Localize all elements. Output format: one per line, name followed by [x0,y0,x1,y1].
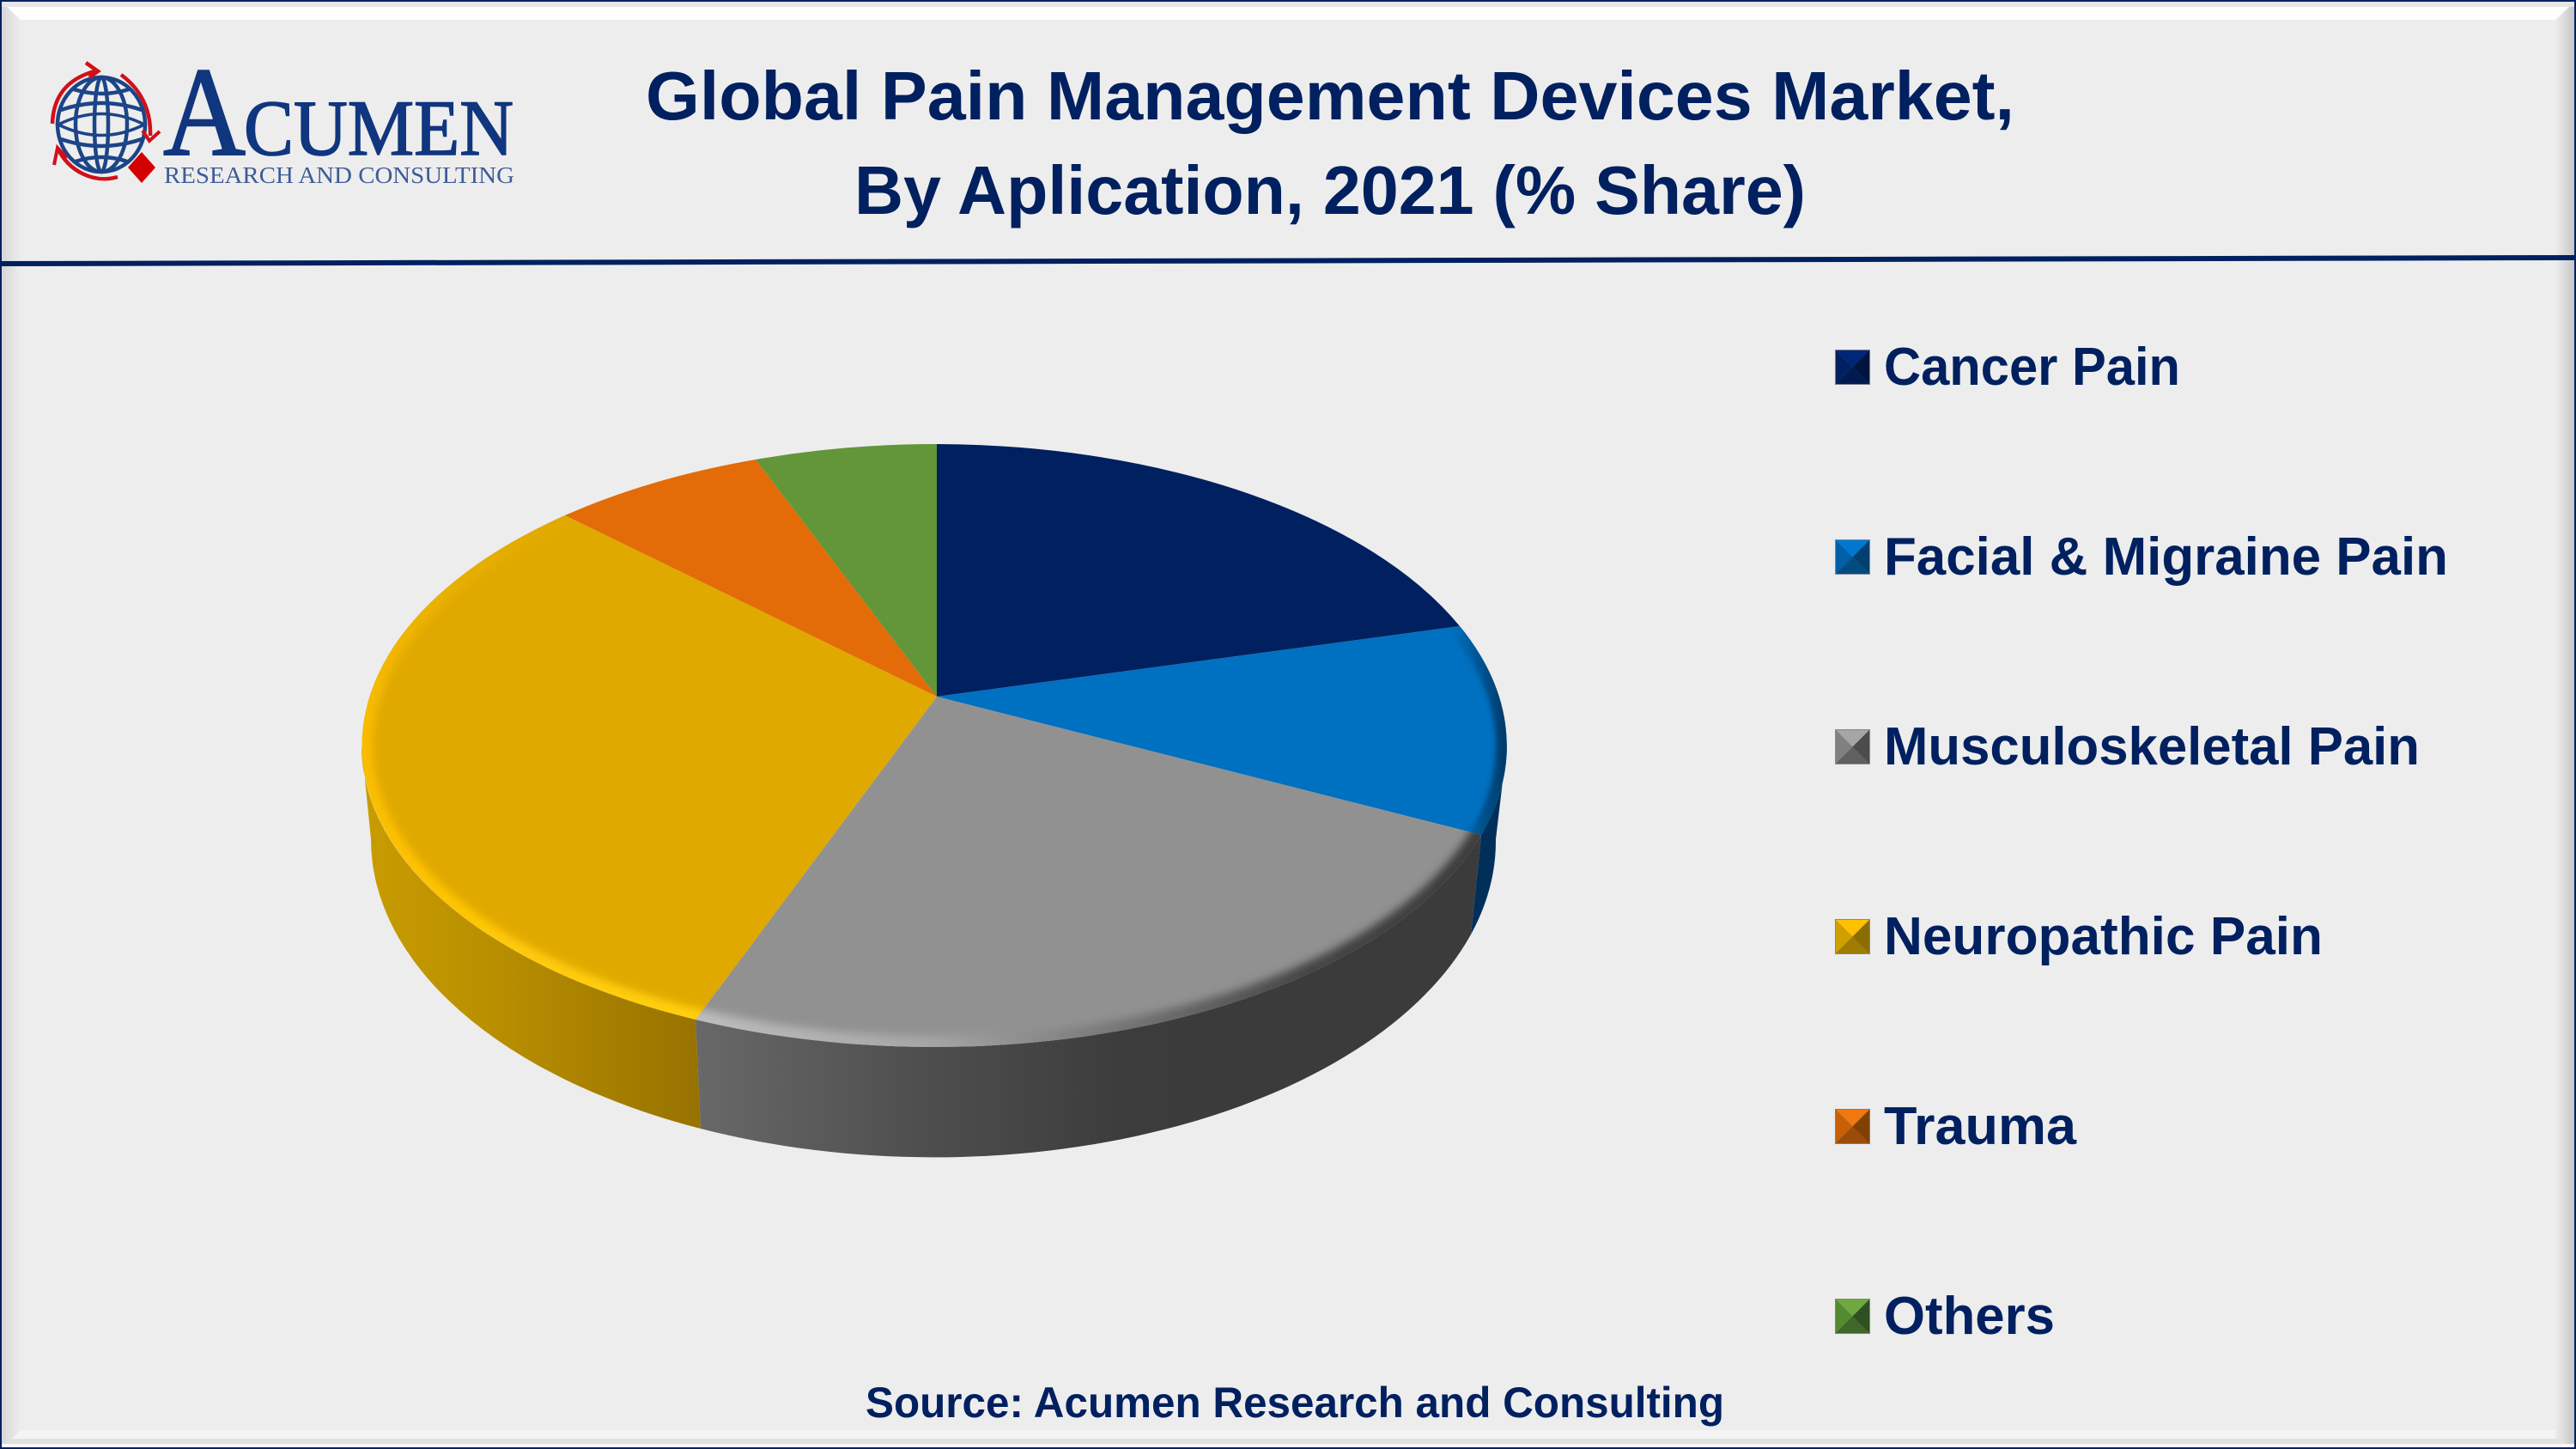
legend item: Trauma: Trauma [1884,1097,2077,1156]
legend [1835,338,2448,1346]
3D pie chart [361,444,1507,1157]
slice: Neuropathic Pain [362,515,937,1020]
logo: Acumen Research and Consulting: CUMEN [244,84,513,172]
slice: Others [756,444,937,697]
logo: Acumen Research and Consulting [52,42,514,188]
pie side: Neuropathic Pain [361,746,701,1129]
slice: Facial & Migraine Pain [938,626,1507,835]
pie side: Facial & Migraine Pain [1471,746,1507,935]
legend item: Musculoskeletal Pain: Musculoskeletal Pain [1884,717,2420,776]
legend item: Others: Others [1884,1287,2055,1346]
title [646,58,2014,228]
title: Global Pain Management Devices Market, [646,58,2014,134]
icon: red diamond [128,152,155,183]
slice: Musculoskeletal Pain [696,697,1481,1047]
icon: red cycle arrows [52,63,160,179]
header divider line [0,255,2576,266]
source note: Source: Acumen Research and Consulting [866,1379,1724,1427]
legend item: Cancer Pain: Cancer Pain [1884,338,2180,397]
slice: Cancer Pain [937,444,1460,697]
title: By Aplication, 2021 (% Share) [854,152,1806,228]
slice: Trauma [565,460,937,697]
logo tagline: RESEARCH AND CONSULTING [164,162,514,188]
logo wordmark: A [163,42,246,183]
legend item: Neuropathic Pain: Neuropathic Pain [1884,907,2323,966]
legend item: Facial & Migraine Pain: Facial & Migraine Pain [1884,527,2448,587]
icon: globe [58,77,145,172]
pie side: Musculoskeletal Pain [696,835,1481,1157]
